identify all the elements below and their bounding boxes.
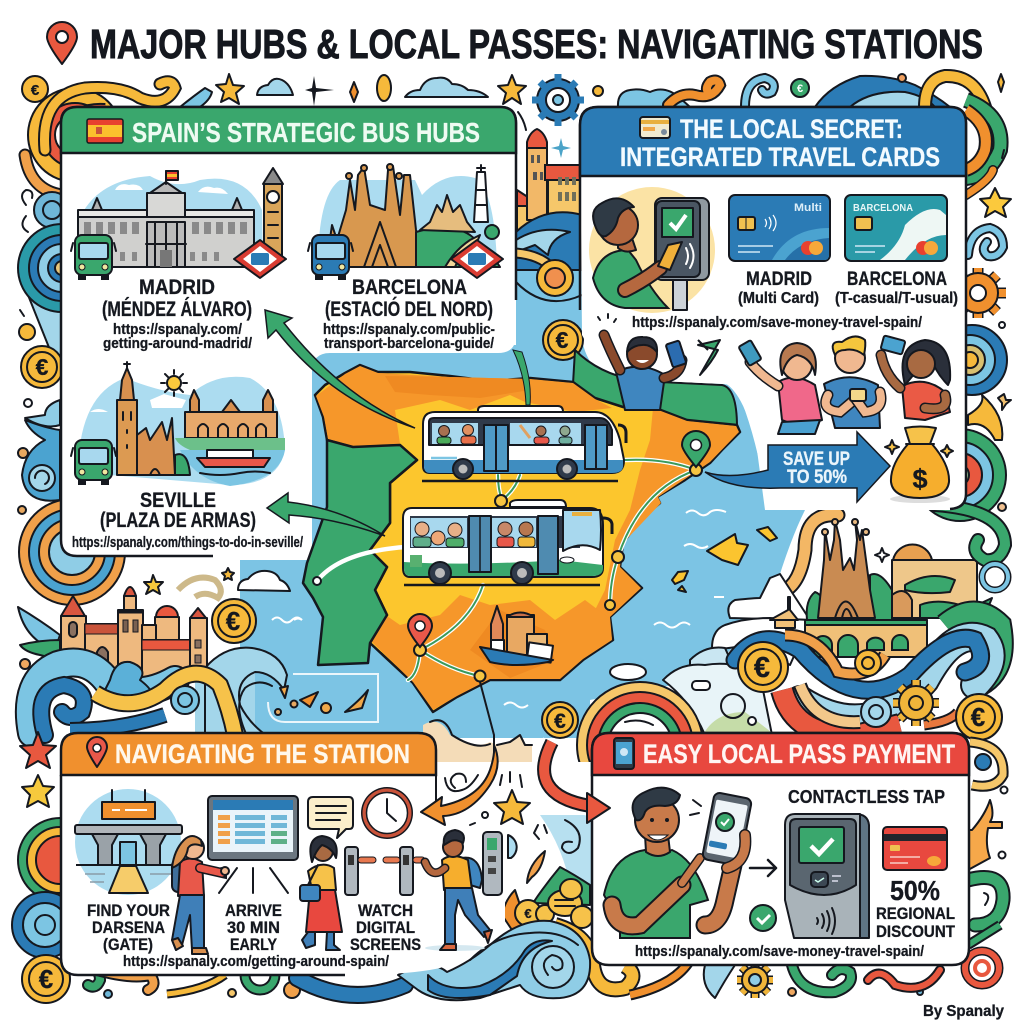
sea background [240,270,805,738]
icon: title map pin [47,22,77,64]
wave band [30,648,287,738]
illustration: departures monitor [208,796,298,893]
panel: easy local pass payment [592,733,969,965]
green swirls [935,505,1008,590]
clouds [610,515,838,735]
Portugal shape [303,440,417,665]
route lines [317,460,696,680]
arrow: map to Barcelona [513,350,530,405]
label: 50% regional discount: 50% [890,875,940,906]
icon: clock [361,787,413,839]
step labels: SCREENS [350,935,421,954]
panel body [580,107,966,510]
panel header [592,733,969,775]
icon: speech bubble [308,797,353,838]
panel header [61,107,516,153]
panel header [580,107,966,176]
Madrid labels: MADRID [139,276,215,299]
panel: navigating the station [61,733,517,975]
red arrow and coin: € [554,710,566,733]
step labels: WATCH [358,901,413,920]
hub: Barcelona: https://spanaly.com/public- [323,322,495,338]
town illustration [18,587,207,680]
blue and orange waves: € [754,652,770,684]
credit: By Spanaly [923,1003,1004,1020]
icon: coastal town and boat [480,606,553,665]
hub: Barcelona: (ESTACIÓ DEL NORD) [325,297,493,321]
sea ripples [294,510,726,708]
decorative bottom and side swirls: € [39,964,53,994]
orange arrow [421,745,498,825]
hub: Madrid: (MÉNDEZ ÁLVARO) [102,298,252,321]
decorative column: town, waves and coins between panels [516,129,583,360]
illustration: Sagrada Familia and Park Güell [318,164,500,267]
step labels [87,901,421,954]
label: 50% regional discount [876,875,956,941]
decorative left border swirls and coins: € [36,354,49,380]
card labels [738,269,958,307]
Spain regions [316,366,739,710]
link: https://spanaly.com/save-money-travel-spain/ [632,314,923,331]
icon: smartphone [614,738,634,769]
step labels: 30 MIN [227,918,280,937]
decorative top border swirls [22,74,1004,182]
hub: Madrid [71,168,286,352]
icon: Madrid station sign [234,240,286,278]
illustration: turnstiles [345,847,425,895]
hub: Seville: https://spanaly.com/things-to-do-in-seville/ [72,535,303,551]
card labels: MADRID [746,269,812,290]
panel heading: NAVIGATING THE STATION [115,739,410,769]
panel header [61,733,436,775]
doodles [445,772,547,839]
Spain shape [315,365,740,712]
big wave in lower centre [398,921,632,1000]
icon: blue bus [308,235,353,280]
decorative bottom and side swirls [12,732,1008,1003]
icon: canary islands inset [268,674,378,722]
illustration: station gate [75,789,182,895]
hub: Madrid: https://spanaly.com/ [113,322,242,338]
decorative right border swirls and coins [914,100,1011,521]
step labels: EARLY [230,935,278,954]
cathedral [770,519,1008,657]
icon: green bus [71,440,116,485]
card: Madrid Multi: Multi [794,202,822,214]
bus: white and blue [422,406,626,481]
card: Barcelona: BARCELONA [853,202,913,214]
step labels: ARRIVE [225,901,282,920]
step labels: FIND YOUR [87,901,170,920]
decorative lower-left: town and waves: € [226,606,240,636]
panel: the local secret, integrated travel cards [580,107,966,510]
link: https://spanaly.com/getting-around-spain/ [123,954,389,970]
icon: green map pin [682,431,710,467]
illustration: woman in red skirt [300,836,342,950]
Balearic islands [672,527,777,592]
red arrow and coin [542,702,610,823]
icon: Spanish flag [87,119,123,143]
hub: Seville: (PLAZA DE ARMAS) [100,509,256,532]
illustration: Giralda and Plaza de España [78,362,285,486]
card labels: (T-casual/T-usual) [835,290,958,307]
light blue water column [540,815,592,895]
Seville labels: SEVILLE [140,489,216,512]
label: 50% regional discount: REGIONAL [876,904,955,923]
step labels: (GATE) [103,935,153,954]
icon: check badge [750,905,776,931]
thin line from map to arrow [480,682,494,755]
arrow: map to Madrid [265,310,415,428]
route nodes [313,464,702,682]
Barcelona labels: BARCELONA [352,276,467,299]
illustration: happy travellers with cards [598,314,950,434]
icon: phone with check [702,792,752,868]
hub: Barcelona [308,164,503,352]
panel heading: THE LOCAL SECRET: [680,114,903,144]
card labels: BARCELONA [847,269,947,290]
icon: Barcelona station sign [451,240,503,278]
icon: money bag: $ [912,464,928,494]
link: https://spanaly.com/save-money-travel-spain/ [635,944,924,960]
decorative column: town, waves and coins between panels: € [556,327,569,353]
icon: coins, leaves and flame: € [524,906,532,921]
label: 50% regional discount: DISCOUNT [876,922,956,941]
map of Spain and Portugal [294,350,777,712]
arrow: save up to 50%: TO 50% [787,467,847,488]
decorative top border swirls: € [31,82,40,99]
hub: Madrid: getting-around-madrid/ [103,336,252,352]
hub: Barcelona: transport-barcelona-guide/ [324,336,494,352]
panel: the local secret, integrated travel cards: INTEGRATED TRAVEL CARDS [620,142,940,172]
label: contactless tap: CONTACTLESS TAP [788,787,945,807]
decorative top border swirls: € [797,83,803,95]
icon: star [494,790,530,824]
icon: travel card [640,117,670,138]
decorative left border swirls and coins [18,155,125,605]
icon: green bus [71,235,116,280]
arrow: save up to 50%: SAVE UP [783,449,850,470]
arrow to terminal [750,860,776,876]
panel body [592,733,969,965]
card labels: (Multi Card) [738,290,819,307]
illustration: woman with backpack [172,836,229,954]
illustration: payment terminal [785,814,869,938]
panel heading: EASY LOCAL PASS PAYMENT [643,739,955,769]
France region [573,350,737,427]
icon: money bag [885,426,953,503]
rainbow arch [577,682,703,808]
card: Madrid Multi [729,195,830,261]
icon: coins, leaves and flame [502,851,593,930]
panel: Spain's strategic bus hubs [61,107,516,556]
icon: map pin [87,737,107,767]
hub: Seville [71,362,303,551]
arrow: map to Seville [267,493,385,536]
illustration: man walking [425,830,517,951]
blue and orange waves: € [971,702,985,732]
decorative lower-centre: beach, coins and leaves [423,720,593,975]
card: Barcelona [845,195,947,261]
icon: red bank card [883,827,947,870]
decorative lower-left: town and waves [18,568,378,738]
decorative lower-right: Barcelona landmarks and waves [577,505,1008,808]
step labels: DARSENA [92,918,165,937]
arrows from map to hubs [265,310,530,536]
illustration: Madrid palace [78,168,283,267]
arrow: save up to 50% [705,432,890,502]
overlays in lower centre: arrows, star, doodles [421,682,610,839]
panel body [61,107,516,556]
illustration: person tapping card [589,187,715,313]
blue and orange waves [735,612,1002,740]
title [47,21,983,67]
panel body [61,733,505,975]
bus: white and green [403,500,612,585]
illustration: man with phone [604,788,733,938]
step labels: DIGITAL [356,918,415,937]
icon: red map pin [408,614,432,647]
panel heading: SPAIN’S STRATEGIC BUS HUBS [132,117,480,148]
